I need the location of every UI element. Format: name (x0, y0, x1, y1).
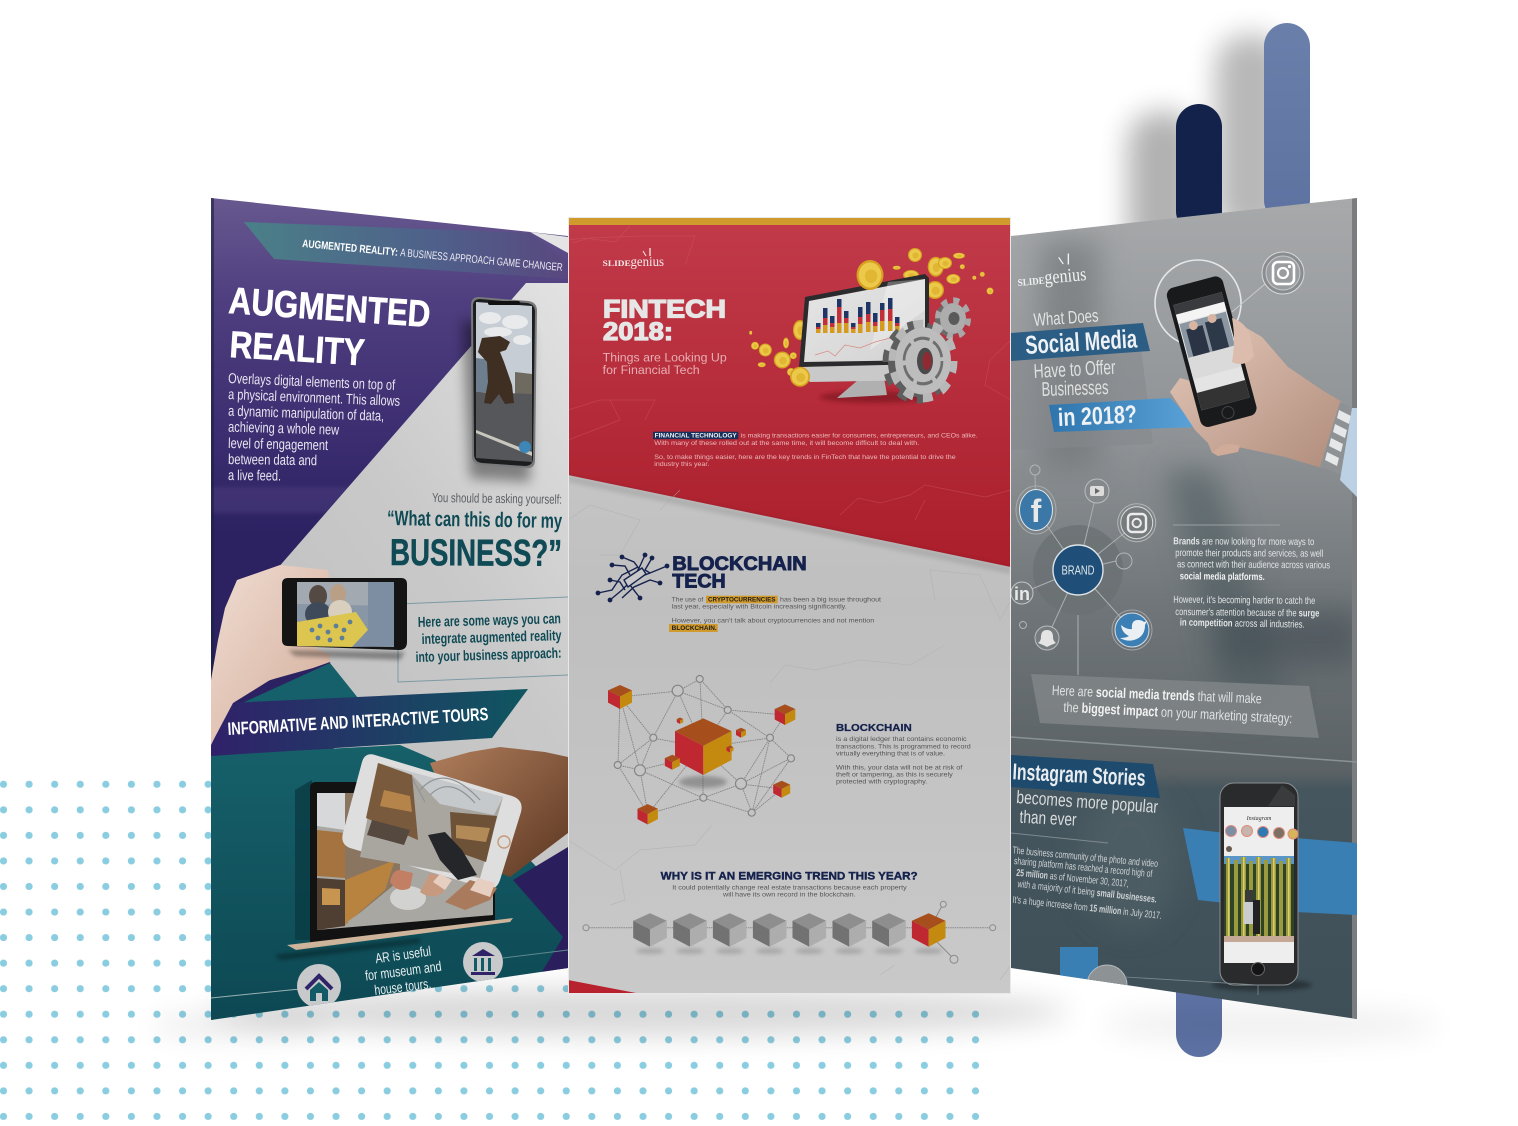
accent bar: navy (1176, 104, 1222, 234)
banner: in 2018 (1049, 398, 1198, 432)
blockchain text: The use of (672, 596, 704, 603)
trends text: the biggest impact on your marketing strategy: (1063, 699, 1293, 726)
panel: fintech (568, 217, 1011, 994)
banner: instagram stories (1011, 755, 1160, 798)
gears (886, 301, 968, 399)
top banner (244, 222, 542, 277)
grey diagonal area (269, 283, 568, 866)
blockchain title (672, 554, 807, 592)
stories rule (1011, 833, 1108, 843)
blockchain definition: transactions. This is programmed to record (836, 743, 971, 750)
main title: AUGMENTED (227, 279, 432, 335)
blockchain definition (836, 722, 971, 786)
main title (228, 288, 430, 366)
watch links (1325, 410, 1351, 466)
connector (1232, 284, 1265, 312)
banner: social media (1011, 323, 1150, 361)
logo: genius (1044, 264, 1087, 289)
panel ground shadow (150, 988, 1440, 1043)
circuit lines red (568, 226, 1011, 520)
brand node: BRAND (1062, 562, 1094, 578)
banner text: in 2018? (1057, 400, 1137, 432)
icon: youtube (1085, 479, 1109, 503)
brand node (1053, 545, 1103, 595)
brands paragraph: social media platforms. (1180, 571, 1265, 583)
subtitle (603, 353, 727, 377)
panel: social media (1011, 198, 1360, 1023)
bottom circle icon (1087, 965, 1127, 1005)
AR phone (462, 297, 537, 482)
bottom rule (1125, 977, 1258, 995)
brown hand (430, 747, 568, 877)
dot grid (0, 772, 990, 1126)
blockchain title: TECH (672, 571, 726, 592)
logo (603, 248, 664, 269)
subtitle: becomes more popular (1016, 787, 1159, 817)
icon: twitter (1112, 610, 1152, 650)
logo: SLIDE (603, 259, 631, 268)
brands paragraph: in competition across all industries. (1180, 618, 1305, 631)
intro text: FINANCIAL TECHNOLOGY (655, 433, 738, 440)
tour banner (211, 689, 528, 756)
intro text: is making transactions easier for consumers, entrepreneurs, and CEOs alike. (741, 433, 978, 440)
network diagram (608, 676, 795, 824)
intro text: industry this year. (654, 461, 710, 468)
section divider (1011, 737, 1357, 762)
intro paragraph: a dynamic manipulation of data, (228, 404, 384, 425)
teal lower section (211, 745, 568, 1040)
icon: snapchat (1035, 626, 1059, 650)
intro text: So, to make things easier, here are the key trends in FinTech that have the potential to drive the (654, 454, 956, 461)
subtitle 2: than ever (1019, 807, 1077, 830)
header text: AUGMENTED REALITY: (302, 238, 398, 259)
ring around phone (1155, 260, 1241, 346)
stories paragraph: It's a huge increase from 15 million in July 2017. (1012, 895, 1162, 922)
monitor (799, 274, 930, 403)
heading text: What Does (1033, 306, 1099, 330)
question text: You should be asking yourself: (432, 490, 562, 507)
brands paragraph: as connect with their audience across various (1177, 559, 1330, 571)
brands paragraph: However, it's becoming harder to catch the (1173, 595, 1316, 607)
icon: linkedin (1011, 582, 1033, 604)
baseline rule (211, 989, 300, 998)
red section (568, 225, 1011, 567)
blockchain definition: theft or tampering, as this is securely (836, 772, 954, 779)
accent bar: light blue top (1264, 23, 1310, 223)
why text: It could potentially change real estate transactions because each property (672, 884, 908, 891)
museum text (364, 946, 442, 995)
blockchain definition: BLOCKCHAIN (836, 722, 912, 734)
logo: genius (630, 254, 664, 269)
intro paragraph: level of engagement (228, 436, 328, 454)
heading backing (1011, 352, 1146, 390)
integrate text (416, 616, 562, 664)
blockchain definition: is a digital ledger that contains economic (836, 736, 967, 743)
panel border (568, 218, 1010, 994)
trends callout (1031, 674, 1319, 738)
rule right (503, 950, 568, 958)
blockchain text: has been a big issue throughout (780, 596, 881, 603)
main title: FINTECH (603, 296, 726, 324)
teal wedge (240, 663, 358, 704)
logo: SLIDE (1017, 276, 1045, 289)
purple triangle (513, 847, 568, 975)
why heading: WHY IS IT AN EMERGING TREND THIS YEAR? (661, 870, 918, 882)
panel: augmented reality (211, 198, 568, 1040)
why text: will have its own record in the blockchain. (722, 891, 856, 898)
heading text 3: Businesses (1041, 377, 1109, 401)
icon: instagram top (1262, 252, 1304, 294)
intro text (653, 432, 978, 468)
brands paragraph: promote their products and services, as well (1175, 548, 1323, 560)
accent bar: light blue bottom (1176, 940, 1222, 1057)
banner title: Instagram Stories (1012, 758, 1146, 791)
bottom blue block (1060, 947, 1098, 983)
main title: REALITY (228, 323, 366, 373)
blockchain definition: protected with cryptography. (836, 779, 928, 786)
blockchain definition: virtually everything that is of value. (836, 750, 945, 757)
blockchain text: last year, especially with Bitcoin increasing significantly. (672, 604, 847, 611)
instagram phone: Instagram (1246, 816, 1272, 822)
icon: house (297, 964, 341, 1008)
stories paragraph: with a majority of it being small businesses. (1016, 879, 1157, 906)
callout frame (398, 597, 568, 682)
top corner (530, 232, 568, 253)
brands paragraph (1173, 536, 1330, 631)
intro paragraph: a physical environment. This allows (228, 387, 400, 410)
integrate text: integrate augmented reality (421, 628, 562, 648)
subtitle: Things are Looking Up (603, 353, 727, 365)
main title: 2018: (603, 318, 673, 346)
heading text 2: Have to Offer (1033, 357, 1116, 383)
icon: museum (463, 942, 503, 982)
watch (1320, 402, 1357, 480)
header text (302, 240, 562, 271)
blockchain definition: With this, your data will not be at risk of (836, 764, 963, 771)
intro paragraph: a live feed. (228, 468, 281, 485)
panel: augmented reality: BUSINESS?” (390, 531, 562, 574)
integrate text: Here are some ways you can (418, 611, 561, 631)
intro text: With many of these rolled out at the same time, it will become difficult to deal with. (654, 440, 920, 447)
blockchain text: However, you can't talk about cryptocurrencies and not mention (672, 618, 875, 625)
brands paragraph: Brands are now looking for more ways to (1173, 536, 1315, 548)
blue band left (1183, 828, 1225, 903)
small nodes (1020, 465, 1132, 628)
subtitle: for Financial Tech (603, 365, 700, 377)
panel: augmented reality: “What can this do for my (387, 507, 563, 533)
intro paragraph: between data and (228, 452, 317, 469)
stories paragraph: sharing platform has reached a record high of (1013, 856, 1153, 880)
bar shadows (1128, 35, 1286, 262)
sleeve (1340, 408, 1357, 497)
hand with phone (1165, 275, 1342, 468)
integrate text: into your business approach: (415, 646, 562, 666)
main title (603, 296, 726, 346)
chart bars (816, 298, 900, 333)
icon: facebook (1016, 486, 1056, 534)
gear large (886, 324, 954, 399)
trends text (1052, 682, 1293, 726)
gold strip (568, 217, 1011, 225)
hand holding phone (211, 565, 407, 745)
museum text: house tours. (373, 975, 432, 998)
blockchain text: BLOCKCHAIN. (672, 625, 717, 632)
rule (1173, 524, 1280, 526)
gear small (935, 301, 968, 336)
blue band right (1295, 838, 1357, 915)
why text (672, 884, 908, 898)
icon: instagram (1118, 504, 1156, 542)
icon: facebook: f (1031, 493, 1042, 529)
blurred background shapes (1040, 240, 1360, 930)
tour banner title: INFORMATIVE AND INTERACTIVE TOURS (227, 704, 489, 739)
museum text: for museum and (364, 958, 442, 984)
stories paragraph (1012, 845, 1162, 922)
intro paragraph (228, 371, 400, 485)
icon: circuit chip (596, 553, 669, 602)
white phone (342, 754, 522, 889)
red diagonal shadow (568, 475, 1011, 574)
fingers (390, 870, 497, 910)
blockchain text: CRYPTOCURRENCIES (708, 597, 776, 604)
museum text: AR is useful (374, 943, 432, 966)
block chain row (583, 901, 996, 963)
trends text: Here are social media trends that will make (1052, 682, 1262, 706)
intro paragraph: Overlays digital elements on top of (228, 371, 396, 394)
header text: A BUSINESS APPROACH GAME CHANGER (400, 247, 563, 274)
banner text: Social Media (1024, 323, 1138, 360)
blockchain title: BLOCKCHAIN (672, 554, 807, 575)
coins (749, 248, 994, 387)
circuit lines grey (568, 490, 1011, 980)
instagram phone (1212, 783, 1312, 991)
social diagram (1011, 465, 1156, 675)
logo (1018, 254, 1086, 288)
intro paragraph: achieving a whole new (228, 420, 340, 439)
bottom red corner (568, 980, 641, 994)
stories paragraph: 25 million as of November 30, 2017, (1016, 868, 1129, 890)
coins back (793, 270, 944, 340)
stories paragraph: The business community of the photo and video (1012, 845, 1159, 870)
icon: linkedin: in (1014, 584, 1030, 604)
blockchain text (669, 596, 881, 632)
brands paragraph: consumer's attention because of the surge (1175, 607, 1320, 620)
laptop (275, 780, 513, 960)
